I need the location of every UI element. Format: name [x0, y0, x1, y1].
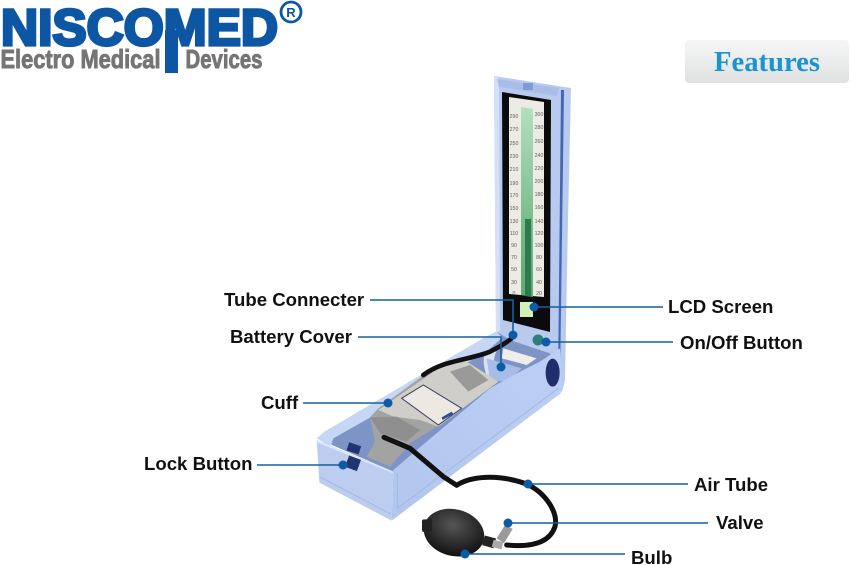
scale numbers: 270	[510, 127, 518, 133]
callout: Valve: Valve	[716, 512, 764, 533]
callout: Valve	[504, 512, 764, 533]
features badge	[685, 40, 849, 83]
cuff	[367, 362, 498, 467]
logo M stem	[165, 30, 178, 73]
scale numbers: 60	[536, 267, 542, 273]
callout: On/Off Button	[542, 332, 803, 353]
scale numbers: 280	[535, 125, 543, 131]
callout: LCD Screen	[530, 296, 773, 317]
scale numbers: 110	[510, 231, 518, 237]
logo	[0, 0, 301, 74]
scale numbers: 30	[511, 280, 517, 286]
callout: LCD Screen: LCD Screen	[668, 296, 773, 317]
scale numbers: 100	[535, 243, 543, 249]
column housing	[494, 76, 571, 392]
bulb	[418, 502, 490, 563]
scale numbers: 200	[535, 179, 543, 185]
logo wordmark: NISCOMED	[1, 0, 278, 56]
scale numbers: 50	[511, 267, 517, 273]
front end panel	[317, 440, 393, 521]
callout: Lock Button: Lock Button	[144, 453, 252, 474]
callout: Cuff	[261, 392, 392, 413]
scale numbers: 160	[535, 205, 543, 211]
scale numbers: 140	[535, 219, 543, 225]
green mercury tube	[521, 107, 533, 297]
scale numbers: 230	[510, 154, 518, 160]
callout: Air Tube	[524, 474, 768, 495]
logo registered mark	[281, 2, 301, 22]
scale numbers: 90	[511, 243, 517, 249]
strap hole	[546, 359, 560, 387]
scale numbers: 170	[510, 193, 518, 199]
callout: Battery Cover: Battery Cover	[230, 326, 352, 347]
scale numbers: 70	[511, 255, 517, 261]
scale numbers: 250	[510, 141, 518, 147]
scale numbers: 80	[536, 255, 542, 261]
logo tagline left: Electro Medical	[0, 44, 160, 74]
scale numbers: 220	[535, 166, 543, 172]
scale numbers: 120	[535, 231, 543, 237]
logo tagline right: Devices	[186, 44, 262, 74]
callout: Lock Button	[144, 453, 348, 474]
scale numbers: 150	[510, 206, 518, 212]
far wall and interior	[317, 332, 558, 472]
on/off button	[532, 334, 544, 346]
scale numbers: 210	[510, 167, 518, 173]
scale numbers: 0	[513, 291, 516, 297]
scale numbers	[510, 112, 543, 297]
base box	[317, 332, 562, 563]
scale numbers: 300	[535, 112, 543, 118]
callout: Air Tube: Air Tube	[694, 474, 768, 495]
scale numbers: 40	[536, 280, 542, 286]
scale numbers: 260	[535, 139, 543, 145]
long side panel	[392, 348, 562, 521]
logo registered mark: R	[286, 5, 296, 20]
callout: Tube Connecter: Tube Connecter	[224, 289, 364, 310]
scale numbers: 130	[510, 219, 518, 225]
black bezel	[502, 92, 551, 332]
callout: Cuff: Cuff	[261, 392, 299, 413]
valve	[482, 525, 513, 549]
white scale plate	[509, 97, 544, 297]
callout: Tube Connecter	[224, 289, 518, 340]
callout: On/Off Button: On/Off Button	[680, 332, 803, 353]
callout: Battery Cover	[230, 326, 506, 372]
callout: Bulb	[460, 547, 672, 565]
scale numbers: 20	[536, 291, 542, 297]
air tube	[384, 338, 556, 546]
scale numbers: 180	[535, 192, 543, 198]
features badge: Features	[714, 47, 820, 78]
device: sphygmomanometer	[317, 76, 571, 563]
scale numbers: 240	[535, 153, 543, 159]
lock button	[345, 442, 361, 471]
lcd display	[520, 302, 533, 317]
scale numbers: 190	[510, 181, 518, 187]
scale numbers: 290	[510, 114, 518, 120]
